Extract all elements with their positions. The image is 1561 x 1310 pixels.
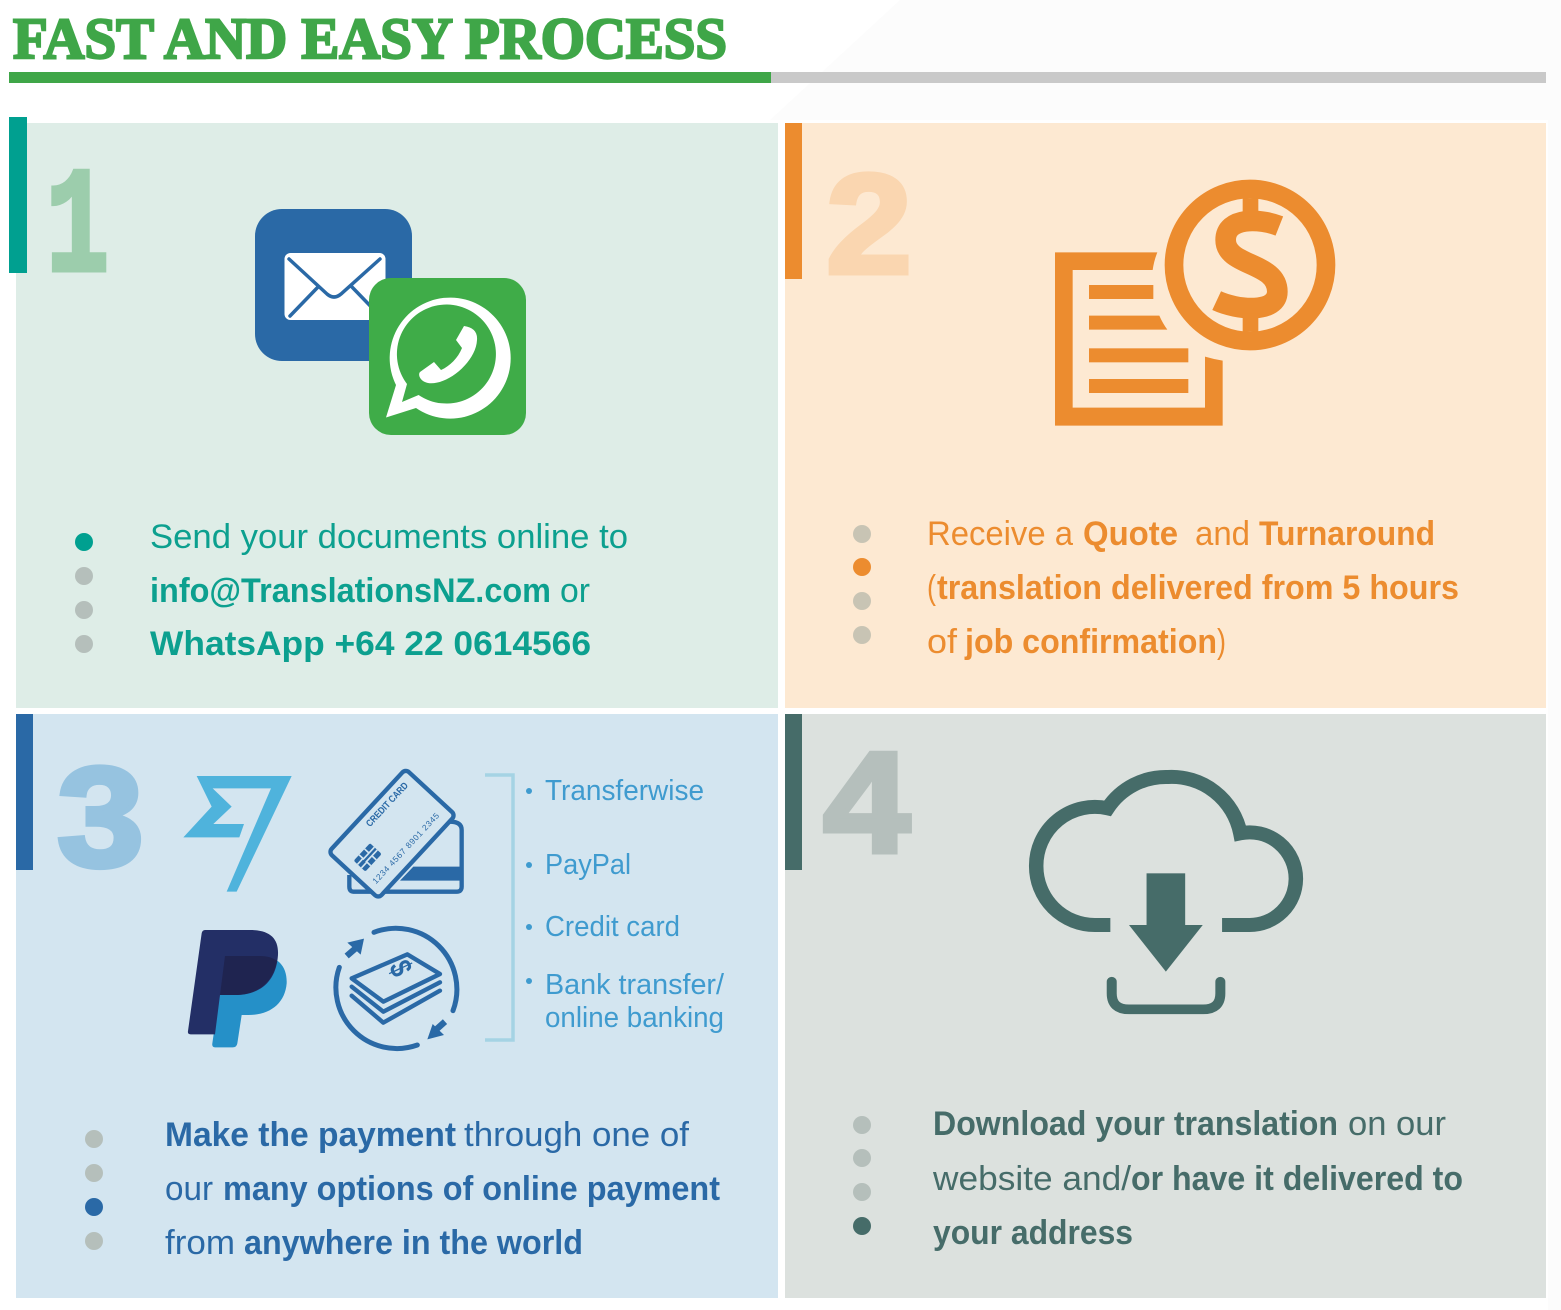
step 3 number: 3 bbox=[57, 738, 144, 897]
step 3 text: through one of bbox=[464, 1116, 690, 1154]
step 3 text bbox=[165, 1116, 720, 1262]
icon: credit cards: 1234 4567 8901 2345 bbox=[370, 810, 441, 886]
panel: step 4 bbox=[785, 714, 1546, 1298]
icon: email bbox=[255, 209, 412, 361]
icon: credit cards: CREDIT CARD bbox=[364, 780, 411, 829]
step 2 text: translation delivered from 5 hours bbox=[937, 569, 1459, 607]
step 1 text: Send your documents online to bbox=[150, 518, 628, 556]
panel: step 3 bbox=[16, 714, 778, 1298]
step 2 text: job confirmation bbox=[964, 623, 1217, 661]
payment list bracket bbox=[485, 775, 513, 1040]
step 2 number: 2 bbox=[826, 145, 912, 304]
step 2 text: and bbox=[1195, 515, 1250, 553]
step 1 accent bar bbox=[9, 117, 27, 273]
step 2 text: ( bbox=[927, 569, 937, 607]
step 4 text: on our bbox=[1348, 1105, 1446, 1143]
icon: quote document with dollar coin bbox=[1055, 189, 1326, 426]
payment options list: Transferwise bbox=[545, 775, 704, 807]
title rule bbox=[9, 72, 1546, 83]
step 2 accent bar bbox=[785, 123, 802, 279]
icon: money transfer cycle: $ bbox=[382, 955, 420, 982]
panel: step 1 bbox=[9, 117, 778, 708]
step 3 accent bar bbox=[16, 714, 33, 870]
step 2 text bbox=[927, 515, 1459, 661]
step 2 text: of bbox=[927, 623, 958, 661]
step 4 text: website and/ bbox=[932, 1160, 1132, 1198]
step 4 accent bar bbox=[785, 714, 802, 870]
payment options list bbox=[526, 775, 725, 1034]
step 1 text: WhatsApp +64 22 0614566 bbox=[150, 625, 591, 663]
icon: money transfer cycle bbox=[336, 928, 457, 1049]
icon: credit cards bbox=[329, 769, 462, 898]
icon: cloud download bbox=[1036, 777, 1296, 1009]
step 4 text: your address bbox=[933, 1214, 1133, 1252]
step 4 text bbox=[932, 1105, 1463, 1252]
icon: PayPal bbox=[188, 930, 287, 1047]
step 4 progress dots bbox=[853, 1116, 871, 1235]
step 3 text: from bbox=[165, 1224, 235, 1262]
step 4 text: or have it delivered to bbox=[1131, 1160, 1463, 1198]
payment options list: Credit card bbox=[545, 911, 680, 943]
step 2 text: Turnaround bbox=[1259, 515, 1435, 553]
payment options list: PayPal bbox=[545, 849, 631, 881]
payment options list: online banking bbox=[545, 1002, 724, 1034]
step 1 text: or bbox=[560, 572, 590, 610]
step 1 text bbox=[150, 518, 628, 663]
title: FAST AND EASY PROCESS bbox=[13, 6, 727, 71]
panel: step 2 bbox=[785, 123, 1546, 708]
step 4 text: Download your translation bbox=[933, 1105, 1338, 1143]
step 1 number: 1 bbox=[46, 146, 109, 316]
step 2 progress dots bbox=[853, 525, 871, 644]
step 2 text: ) bbox=[1217, 623, 1226, 661]
icon: WhatsApp bbox=[369, 278, 526, 435]
icon: Transferwise bbox=[183, 776, 292, 892]
step 3 text: anywhere in the world bbox=[244, 1224, 583, 1262]
step 1 text: info@TranslationsNZ.com bbox=[150, 572, 551, 610]
step 3 text: many options of online payment bbox=[223, 1170, 720, 1208]
step 3 text: our bbox=[165, 1170, 213, 1208]
step 2 text: Quote bbox=[1083, 515, 1178, 553]
step 4 number: 4 bbox=[820, 728, 914, 898]
step 2 text: Receive a bbox=[927, 515, 1073, 553]
step 3 text: Make the payment bbox=[165, 1116, 456, 1154]
payment options list: Bank transfer/ bbox=[545, 969, 725, 1001]
step 3 progress dots bbox=[85, 1130, 103, 1250]
step 1 progress dots bbox=[75, 533, 93, 653]
